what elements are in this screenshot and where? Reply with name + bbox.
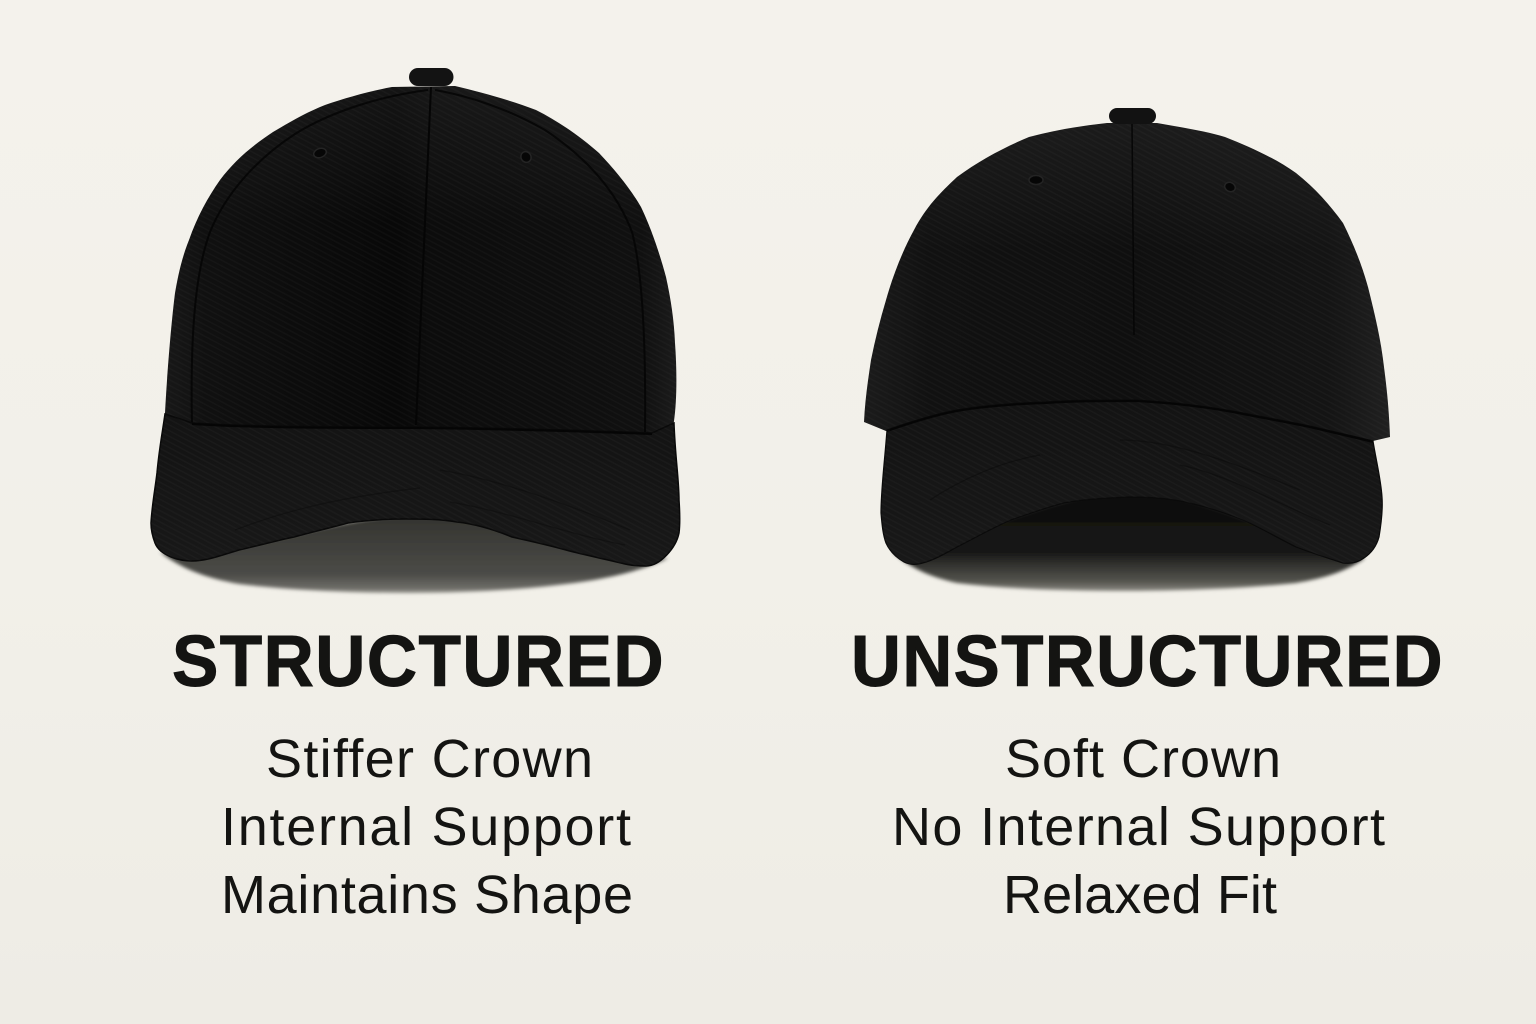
text block: structured traits xyxy=(221,729,633,925)
brim edge line xyxy=(887,401,1373,442)
brim xyxy=(881,400,1382,564)
eyelets xyxy=(1029,176,1237,193)
crown xyxy=(165,86,676,434)
eyelets xyxy=(312,147,533,164)
top button xyxy=(409,68,454,86)
unstructured cap xyxy=(864,108,1390,591)
text block: structured traits: Maintains Shape xyxy=(221,865,633,925)
brim xyxy=(151,414,680,566)
text block: unstructured traits: Relaxed Fit xyxy=(1003,865,1277,925)
text block: structured traits: Internal Support xyxy=(221,797,631,857)
top button xyxy=(1109,108,1156,124)
text block: unstructured traits: No Internal Support xyxy=(892,797,1385,857)
text block: structured traits: Stiffer Crown xyxy=(266,729,593,789)
text block: unstructured traits xyxy=(892,729,1385,925)
crown seams xyxy=(1132,124,1134,335)
crown seams xyxy=(192,87,652,434)
heading: unstructured: UNSTRUCTURED xyxy=(851,622,1444,702)
heading: structured: STRUCTURED xyxy=(172,622,665,702)
structured cap xyxy=(151,68,680,593)
cap shadow xyxy=(893,490,1365,591)
crown xyxy=(864,123,1390,441)
cap shadow xyxy=(160,515,668,593)
text block: unstructured traits: Soft Crown xyxy=(1005,729,1281,789)
